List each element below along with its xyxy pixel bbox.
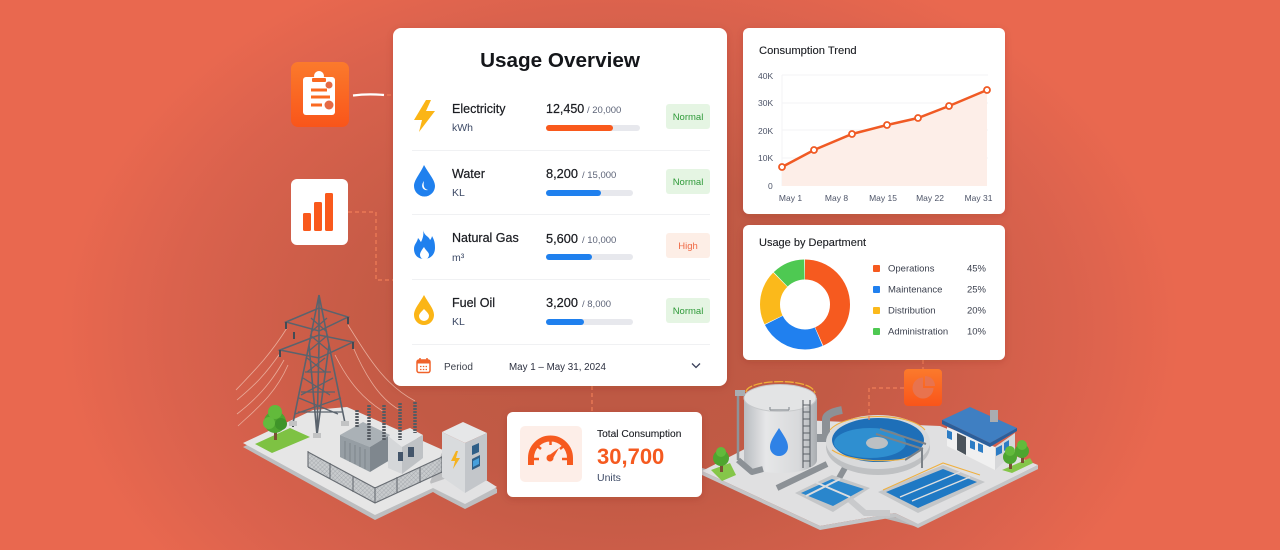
- panel: total consumption: Units: [597, 472, 621, 484]
- row: natural gas: [414, 230, 710, 264]
- row: electricity: Normal: [673, 112, 703, 123]
- legend: Administration: [888, 326, 948, 338]
- row: water: 8,200: [546, 166, 578, 181]
- row: electricity: [414, 100, 710, 134]
- legend: Operations: [888, 264, 935, 274]
- x axis labels: May 31: [965, 193, 993, 203]
- panel: consumption trend: [743, 28, 1005, 214]
- tower footings: [289, 421, 349, 438]
- row: electricity: kWh: [452, 122, 473, 134]
- row: period: May 1 – May 31, 2024: [509, 362, 606, 373]
- heading: Usage Overview: [480, 49, 641, 72]
- row: electricity: Electricity: [452, 102, 506, 116]
- power lines: [236, 325, 415, 426]
- row: fuel oil: Normal: [673, 306, 703, 317]
- donut chart: [770, 270, 840, 340]
- panel: usage by department: [743, 225, 1005, 360]
- row: natural gas: / 10,000: [582, 235, 616, 246]
- legend: Distribution: [888, 306, 936, 316]
- icon: calendar: [417, 358, 430, 372]
- row: fuel oil: KL: [452, 316, 465, 328]
- panel: usage overview: [393, 28, 727, 386]
- icon: chevron: [692, 364, 700, 368]
- tank water drop: [770, 428, 788, 456]
- row: electricity: 12,450: [546, 102, 584, 116]
- row: natural gas: m³: [452, 252, 465, 264]
- panel: total consumption: Total Consumption: [597, 429, 681, 440]
- icon: gauge: [520, 426, 582, 482]
- legend: 45%: [967, 264, 987, 274]
- storage tank: [735, 382, 817, 473]
- y axis labels: [758, 71, 773, 191]
- legend: 20%: [967, 306, 987, 316]
- y axis labels: 20K: [758, 126, 773, 136]
- trend line: [782, 90, 987, 167]
- right trees: [1002, 440, 1033, 473]
- transmission tower: [280, 295, 353, 435]
- left tree: [711, 447, 736, 481]
- area fill: [782, 90, 987, 186]
- y axis labels: 30K: [758, 98, 773, 108]
- icon: oil drop: [414, 295, 434, 325]
- legend: Maintenance: [888, 284, 942, 296]
- fence: [308, 451, 442, 503]
- legend: 25%: [967, 284, 987, 296]
- data points: [779, 87, 990, 170]
- connector lines: [348, 95, 923, 420]
- x axis labels: May 1: [779, 193, 802, 203]
- rectangular basin: [795, 475, 890, 513]
- platform: [702, 465, 1038, 527]
- panel: total consumption: 30,700: [597, 444, 664, 469]
- platform: [243, 410, 497, 520]
- row: water: Water: [452, 167, 485, 181]
- row: fuel oil: 3,200: [546, 295, 578, 310]
- row: period: Period: [444, 362, 473, 373]
- row: water: Normal: [673, 177, 703, 188]
- row: fuel oil: Fuel Oil: [452, 296, 495, 310]
- x axis labels: May 15: [869, 193, 897, 203]
- row: fuel oil: / 8,000: [582, 299, 611, 310]
- icon: lightning bolt: [414, 100, 435, 132]
- row: fuel oil: [414, 295, 710, 328]
- row dividers: [412, 150, 710, 344]
- icon: pie chart tile: [904, 369, 942, 406]
- row: water: / 15,000: [582, 170, 616, 181]
- y axis labels: 10K: [758, 153, 773, 163]
- x axis labels: May 22: [916, 193, 944, 203]
- long basin: [878, 463, 985, 513]
- icon: flame: [414, 230, 435, 259]
- legend: 10%: [967, 326, 987, 338]
- building: [942, 407, 1017, 470]
- illustration: water treatment plant: [702, 382, 1038, 530]
- clarifier: [826, 415, 930, 475]
- transformer: [340, 402, 423, 474]
- pipes: [738, 410, 846, 488]
- x axis labels: May 8: [825, 193, 848, 203]
- legend: [873, 264, 987, 338]
- icon: bar chart tile: [291, 179, 348, 245]
- illustration: power substation: [236, 295, 497, 520]
- y axis labels: 0: [768, 181, 773, 191]
- tree: [263, 405, 287, 440]
- row: water: KL: [452, 187, 465, 199]
- panel: total consumption: [507, 412, 702, 497]
- connector: report: [353, 94, 384, 96]
- line chart: [758, 71, 993, 203]
- icon: water drop: [414, 165, 435, 197]
- heading: Consumption Trend: [759, 45, 857, 57]
- row: natural gas: Natural Gas: [452, 231, 519, 245]
- row: natural gas: 5,600: [546, 231, 578, 246]
- row: period: [417, 358, 700, 373]
- y axis labels: 40K: [758, 71, 773, 81]
- row: water: [414, 165, 710, 199]
- grass: [255, 428, 310, 453]
- row: electricity: / 20,000: [587, 105, 621, 116]
- row: natural gas: High: [678, 241, 698, 252]
- electrical cabinet: [442, 422, 487, 493]
- icon: clipboard tile: [291, 62, 349, 127]
- heading: Usage by Department: [759, 237, 866, 249]
- x axis labels: [779, 193, 993, 203]
